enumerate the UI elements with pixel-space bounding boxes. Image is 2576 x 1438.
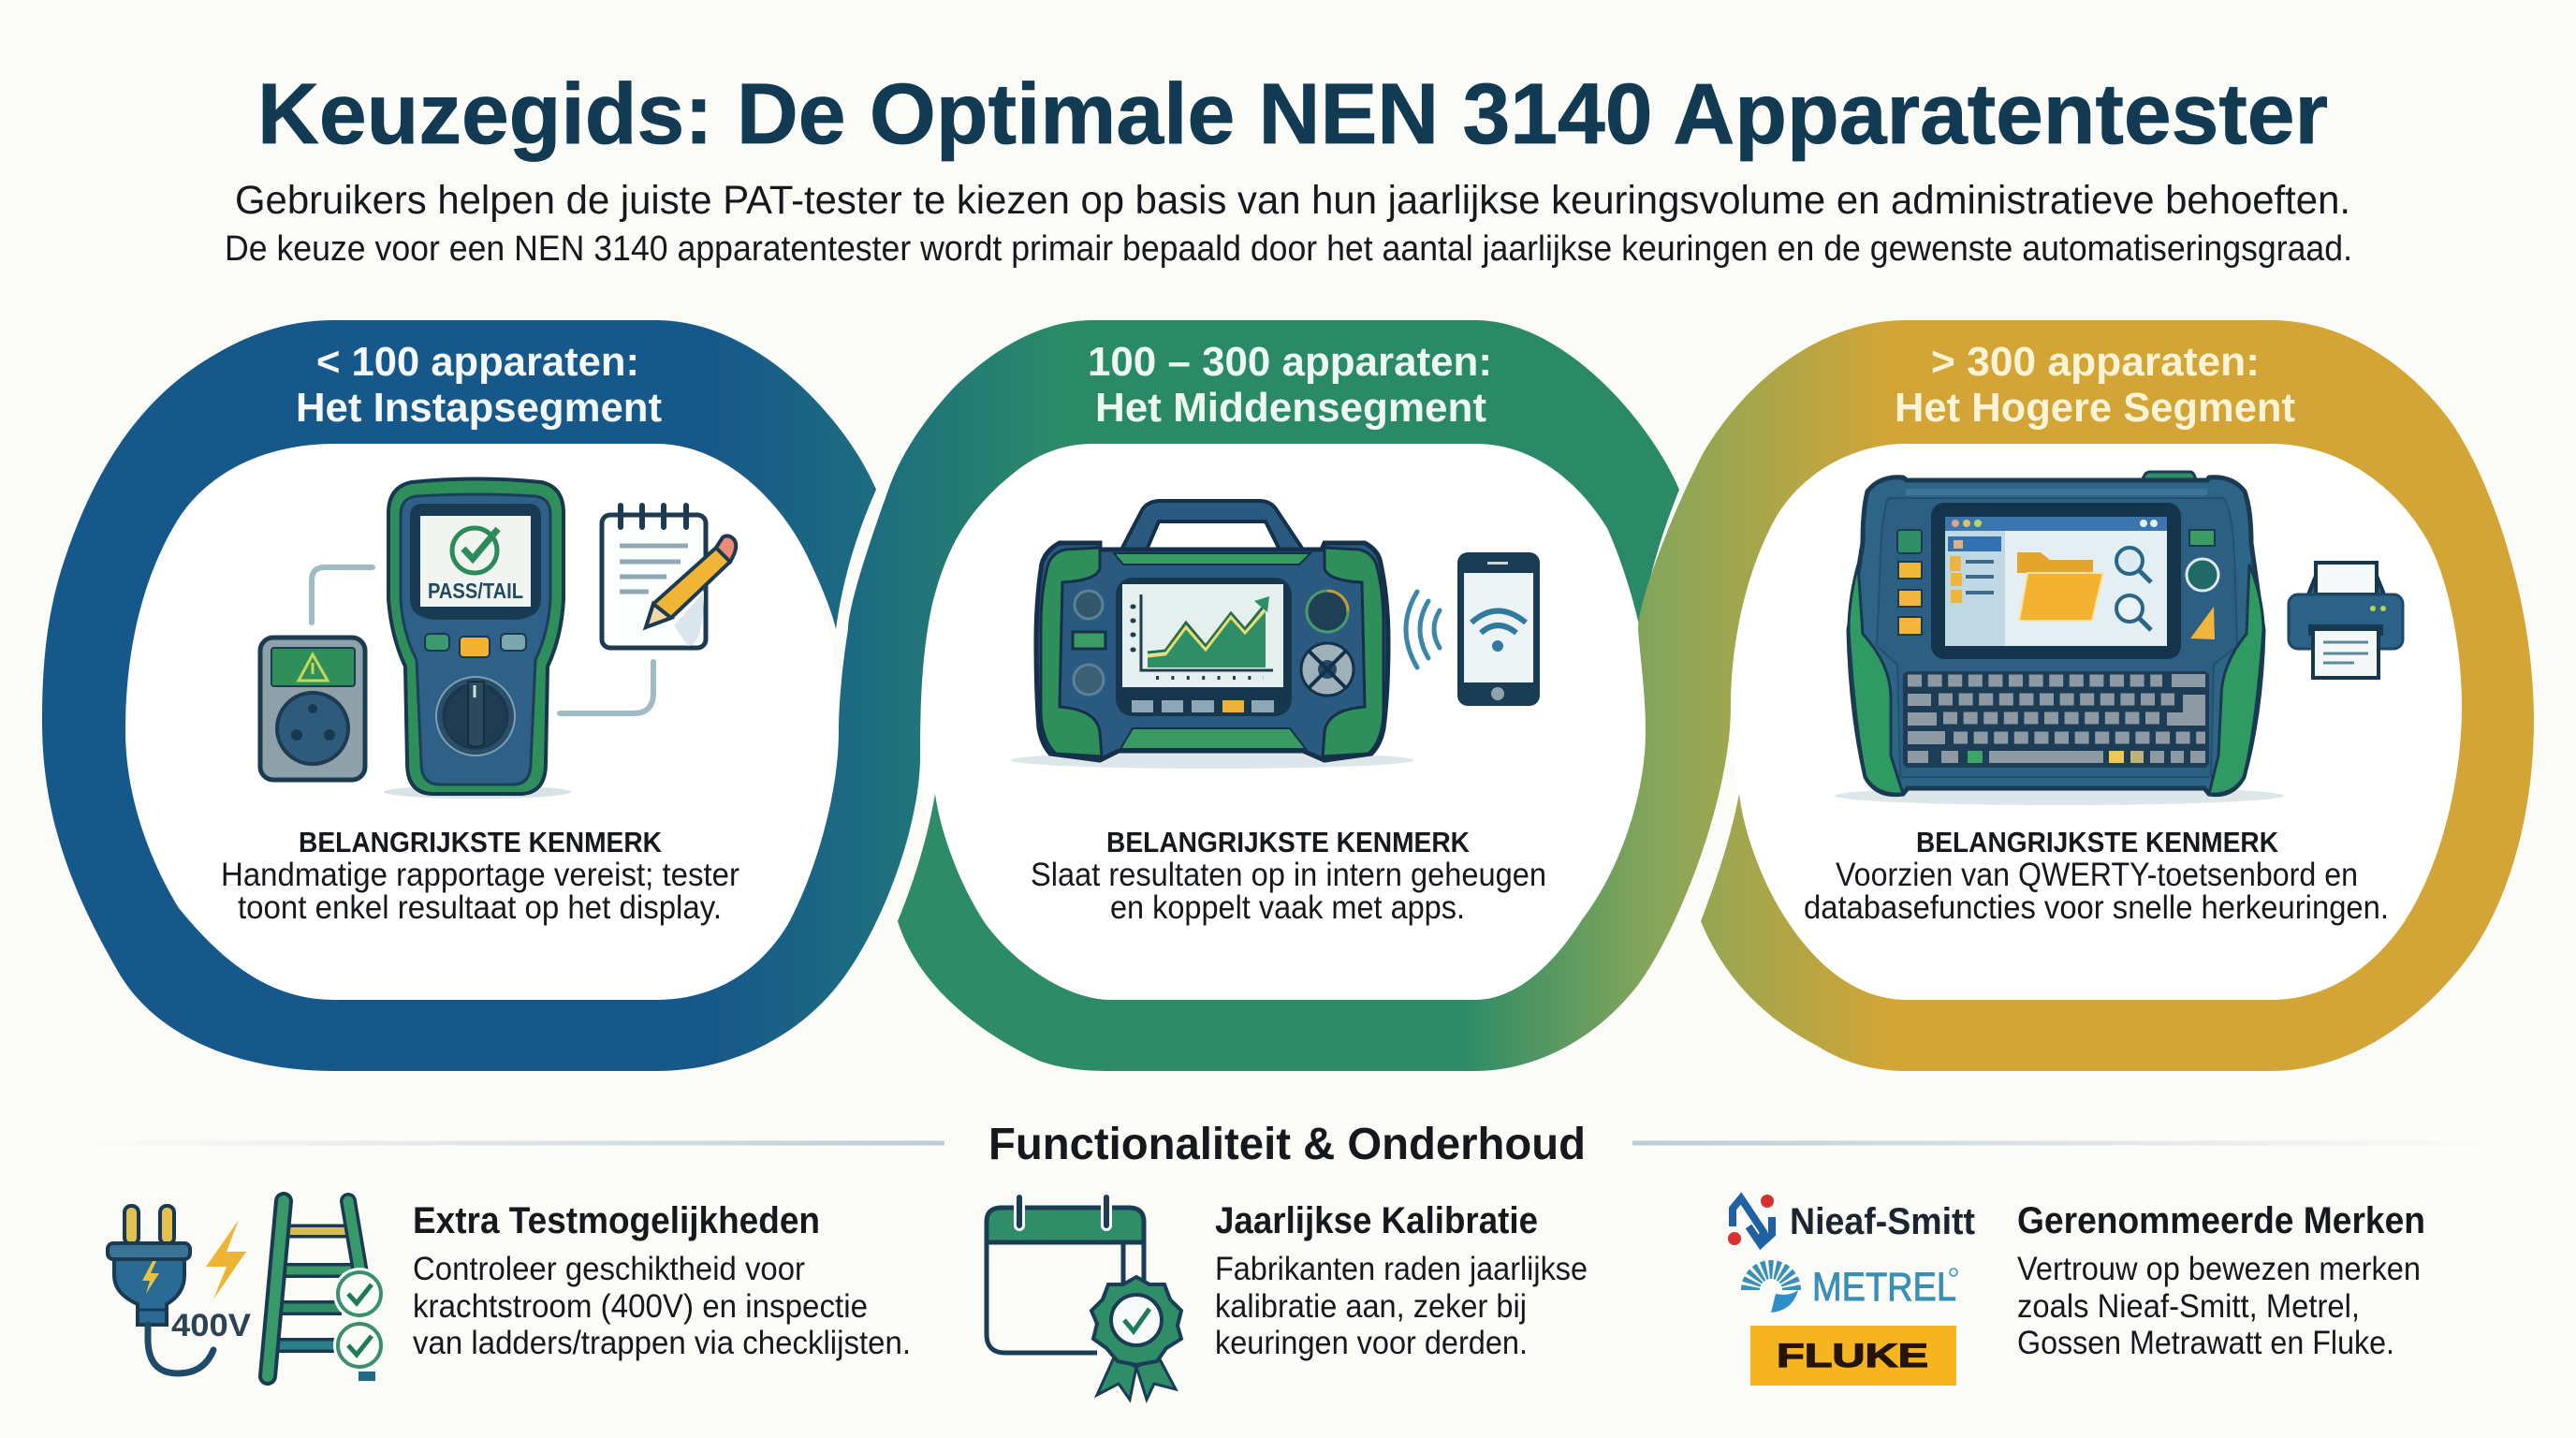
feature text: instapsegment: toont enkel resultaat op het display. xyxy=(238,889,722,926)
logo: Fluke: FLUKE xyxy=(1777,1338,1928,1374)
ribbon: green to gold xyxy=(898,320,2534,1071)
icon: mid-range tester with phone xyxy=(1011,501,1540,769)
section heading: Functionaliteit & Onderhoud xyxy=(988,1120,1586,1169)
icon: advanced tester with keyboard and printer xyxy=(1835,472,2403,805)
text block: jaarlijkse kalibratie: keuringen voor derden. xyxy=(1215,1325,1528,1361)
text block: gerenommeerde merken: Gossen Metrawatt en Fluke. xyxy=(2017,1325,2394,1361)
text block: extra testmogelijkheden: Extra Testmogelijkheden xyxy=(413,1200,820,1241)
feature text: hogere segment: databasefuncties voor snelle herkeuringen. xyxy=(1804,889,2389,926)
icon: plug, 400V and ladder with checks xyxy=(108,1201,386,1381)
text block: extra testmogelijkheden: van ladders/trappen via checklijsten. xyxy=(413,1325,911,1361)
title: Keuzegids: De Optimale NEN 3140 Apparatentester xyxy=(257,66,2328,162)
logo: Fluke xyxy=(1750,1326,1956,1386)
panel heading: middensegment: Het Middensegment xyxy=(1095,385,1486,431)
feature text: middensegment: en koppelt vaak met apps. xyxy=(1110,889,1465,926)
text block: gerenommeerde merken xyxy=(2017,1200,2425,1361)
icon: plug, 400V and ladder with checks: 400V xyxy=(171,1308,251,1343)
text block: extra testmogelijkheden: krachtstroom (400V) en inspectie xyxy=(413,1288,868,1325)
icon: calendar with calibration badge xyxy=(987,1197,1181,1400)
panel heading: middensegment: 100 – 300 apparaten: xyxy=(1088,339,1492,385)
feature text: hogere segment xyxy=(1804,826,2389,926)
icon: basic handheld tester with socket and notepad xyxy=(260,479,736,799)
text block: gerenommeerde merken: Vertrouw op bewezen merken xyxy=(2017,1251,2421,1287)
feature text: hogere segment: BELANGRIJKSTE KENMERK xyxy=(1916,826,2279,858)
feature text: instapsegment: BELANGRIJKSTE KENMERK xyxy=(299,826,663,858)
text block: jaarlijkse kalibratie xyxy=(1215,1200,1588,1361)
panel heading: middensegment xyxy=(1088,339,1492,431)
panel heading: instapsegment: Het Instapsegment xyxy=(296,385,662,431)
subtitle line 2: De keuze voor een NEN 3140 apparatentester wordt primair bepaald door het aantal jaarlijkse keuringen en de gewenste automatiseringsgraad. xyxy=(225,229,2352,269)
text block: gerenommeerde merken: Gerenommeerde Merken xyxy=(2017,1200,2425,1241)
logo: Nieaf-Smitt: Nieaf-Smitt xyxy=(1790,1201,1975,1242)
text block: extra testmogelijkheden xyxy=(413,1200,911,1361)
text block: gerenommeerde merken: zoals Nieaf-Smitt, Metrel, xyxy=(2017,1288,2360,1325)
text block: jaarlijkse kalibratie: kalibratie aan, zeker bij xyxy=(1215,1288,1527,1325)
icon: basic handheld tester with socket and notepad: PASS/TAIL xyxy=(428,579,523,603)
panel heading: hogere segment: Het Hogere Segment xyxy=(1895,385,2295,431)
text block: extra testmogelijkheden: Controleer geschiktheid voor xyxy=(413,1251,805,1287)
subtitle line 1: Gebruikers helpen de juiste PAT-tester te kiezen op basis van hun jaarlijkse keuringsvolume en administratieve behoeften. xyxy=(235,178,2350,223)
logo: Metrel: METREL xyxy=(1812,1265,1956,1310)
panel heading: hogere segment: > 300 apparaten: xyxy=(1931,339,2260,385)
panel heading: instapsegment: < 100 apparaten: xyxy=(316,339,639,385)
feature text: middensegment: BELANGRIJKSTE KENMERK xyxy=(1106,826,1471,858)
text block: jaarlijkse kalibratie: Jaarlijkse Kalibratie xyxy=(1215,1200,1538,1241)
feature text: instapsegment xyxy=(221,826,739,926)
panel heading: instapsegment xyxy=(296,339,662,431)
feature text: hogere segment: Voorzien van QWERTY-toetsenbord en xyxy=(1836,857,2358,893)
panel heading: hogere segment xyxy=(1895,339,2295,431)
ribbon: blue to green xyxy=(42,320,1679,1071)
feature text: middensegment xyxy=(1031,826,1546,926)
text block: jaarlijkse kalibratie: Fabrikanten raden jaarlijkse xyxy=(1215,1251,1588,1287)
logo: Nieaf-Smitt xyxy=(1728,1195,1975,1245)
feature text: instapsegment: Handmatige rapportage vereist; tester xyxy=(221,857,739,893)
panel interiors xyxy=(125,444,2462,1000)
logo: Metrel xyxy=(1750,1265,1957,1313)
feature text: middensegment: Slaat resultaten op in intern geheugen xyxy=(1031,857,1546,893)
